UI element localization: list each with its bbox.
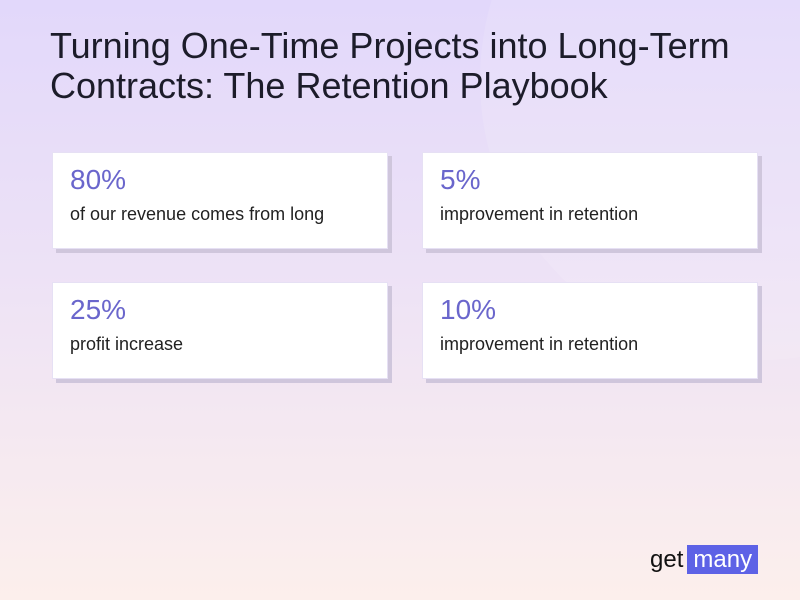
card: 5% [422, 152, 758, 249]
card: 25%: profit increase [70, 334, 183, 354]
card: 80%: 80% [70, 164, 126, 195]
title: Turning One-Time Projects into Long-Term Contracts: The Retention Playbook [50, 25, 730, 106]
card: 5%: improvement in retention [440, 204, 638, 224]
card: 80% [52, 152, 388, 249]
card: 5%: 5% [440, 164, 480, 195]
card: 25%: 25% [70, 294, 126, 325]
card: 10%: improvement in retention [440, 334, 638, 354]
card: 25% [52, 282, 388, 379]
logo [650, 545, 758, 574]
card: 10% [422, 282, 758, 379]
card: 80%: of our revenue comes from long [70, 204, 324, 224]
logo: many [693, 546, 752, 573]
logo: get [650, 546, 683, 573]
card: 10%: 10% [440, 294, 496, 325]
